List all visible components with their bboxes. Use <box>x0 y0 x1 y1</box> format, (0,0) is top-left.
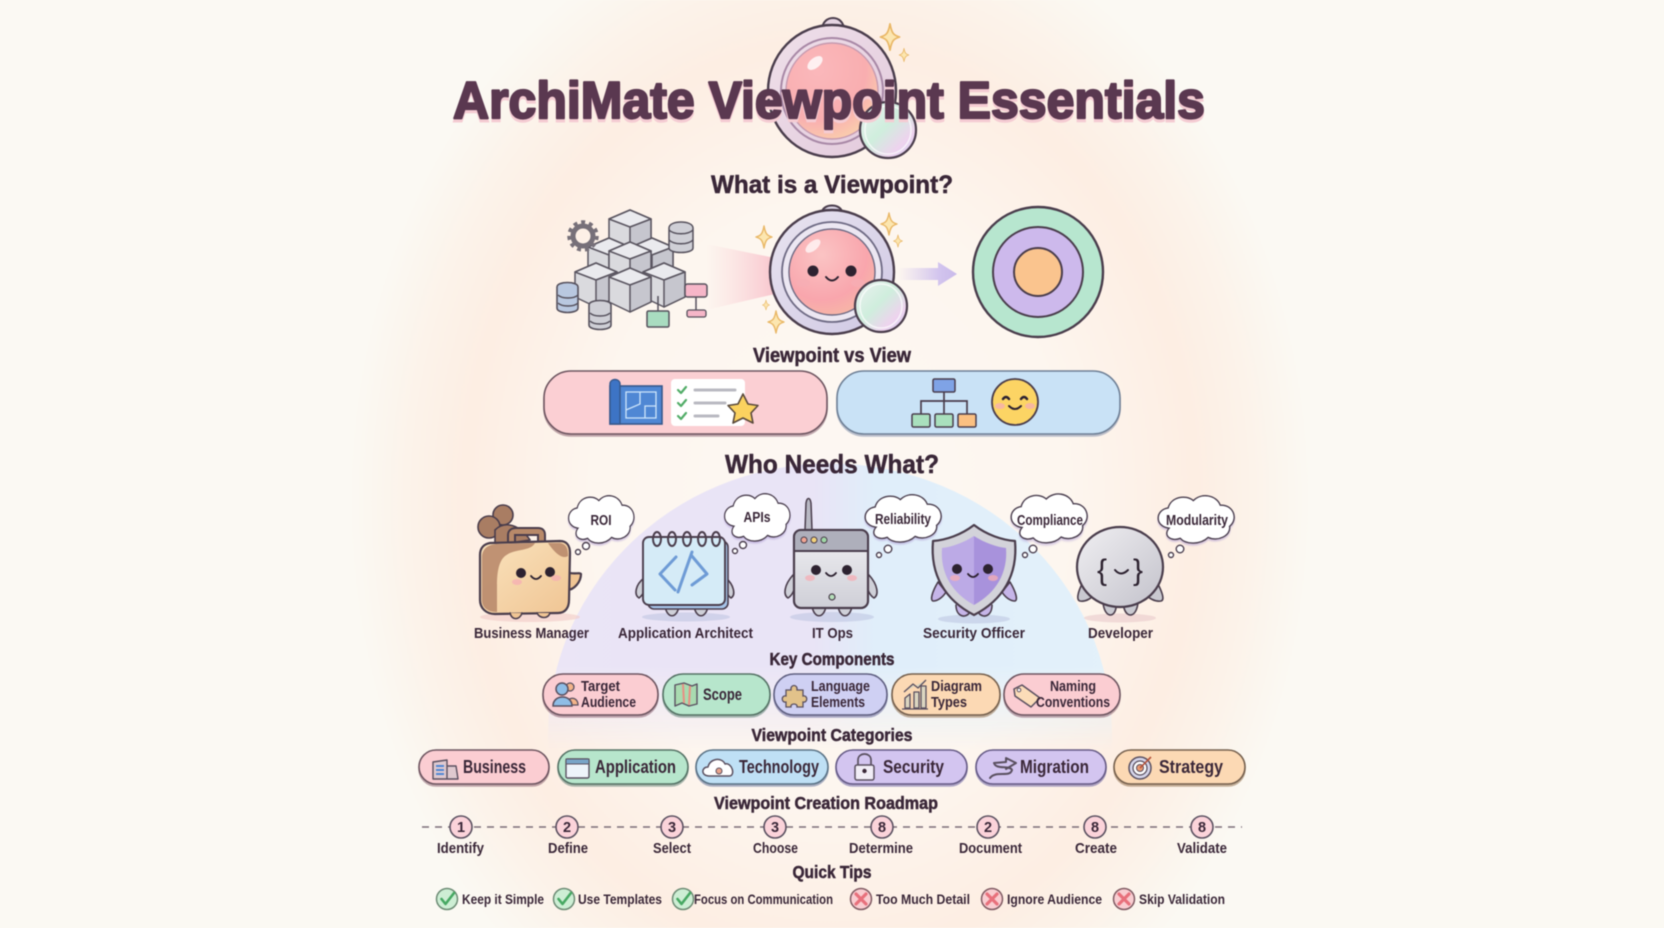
pill: naming conventions: Naming <box>1050 679 1096 695</box>
thought bubble: APIs <box>725 494 790 554</box>
step 1: identify <box>437 816 485 857</box>
tip: keep it simple: Keep it Simple <box>462 892 544 907</box>
pill: technology: Technology <box>739 757 819 777</box>
icon: viewpoint lens character <box>756 206 907 334</box>
pill: technology <box>696 750 828 784</box>
icon: blueprint <box>610 380 662 424</box>
icon: architecture cube pile <box>557 210 707 330</box>
heading: quick tips: Quick Tips <box>792 862 872 882</box>
pill: target audience: Audience <box>581 695 636 711</box>
tip: ignore audience <box>982 888 1102 910</box>
tip: too much detail: Too Much Detail <box>876 892 970 907</box>
icon: sphere character: } <box>1133 554 1143 587</box>
thought bubble: Reliability <box>865 495 941 558</box>
pill: scope <box>663 674 770 715</box>
tip: focus on communication <box>672 888 833 910</box>
pill: diagram types <box>892 674 1000 715</box>
step 3: select: Select <box>653 840 691 857</box>
pill: scope: Scope <box>703 686 742 704</box>
icon: smiley <box>992 379 1038 425</box>
step 6: document: Document <box>959 840 1022 857</box>
step 2: define <box>548 816 588 857</box>
step 7: create <box>1075 816 1117 857</box>
heading: who needs what: Who Needs What? <box>725 449 939 479</box>
step 1: identify: Identify <box>437 840 485 857</box>
label: IT Ops <box>812 625 853 642</box>
pill: naming conventions: Conventions <box>1036 695 1110 711</box>
icon: view target circles <box>973 207 1103 337</box>
title: ArchiMate Viewpoint Essentials <box>453 75 1205 133</box>
step 4: choose: 3 <box>771 820 779 836</box>
roadmap timeline <box>422 816 1242 857</box>
pill: language elements: Elements <box>811 695 865 711</box>
icon: briefcase character <box>478 505 581 619</box>
tip: ignore audience: Ignore Audience <box>1007 892 1102 907</box>
pill: language elements <box>774 674 887 715</box>
heading: what is a viewpoint: What is a Viewpoint? <box>711 171 953 199</box>
thought bubble: Compliance: Compliance <box>1017 513 1083 529</box>
step 7: create: 8 <box>1091 820 1099 836</box>
panel: viewpoint category pills <box>419 750 1245 784</box>
pill: diagram types: Diagram <box>931 679 982 695</box>
tip: use templates <box>554 888 662 910</box>
step 4: choose <box>753 816 798 857</box>
label: Developer <box>1088 625 1153 642</box>
icon: title lens <box>768 18 916 158</box>
thought bubble: APIs: APIs <box>744 510 770 526</box>
persona: application architect <box>618 494 790 642</box>
step 8: validate: 8 <box>1198 820 1206 836</box>
persona: security officer <box>923 494 1087 642</box>
icon: org chart <box>912 379 976 427</box>
icon: notepad character <box>636 532 734 616</box>
pill: target audience <box>543 674 658 715</box>
tip: keep it simple <box>436 888 544 910</box>
thought bubble: Modularity: Modularity <box>1166 513 1228 529</box>
icon: star <box>728 394 758 423</box>
icon: sphere character <box>1077 527 1163 615</box>
pill: language elements: Language <box>811 679 870 695</box>
pill: business <box>419 750 549 784</box>
pill: naming conventions <box>1004 674 1120 715</box>
step 4: choose: Choose <box>753 840 798 857</box>
pill: strategy <box>1114 750 1245 784</box>
panel: view <box>837 371 1120 434</box>
pill: target audience: Target <box>581 679 620 695</box>
background dome <box>548 464 1112 750</box>
thought bubble: Compliance <box>1011 494 1087 558</box>
icon: checklist <box>671 379 745 426</box>
pill: migration: Migration <box>1020 757 1089 777</box>
pill: application <box>558 750 688 784</box>
tip: use templates: Use Templates <box>578 892 662 907</box>
tip: focus on communication: Focus on Communication <box>694 892 833 907</box>
pill: migration <box>976 750 1106 784</box>
step 2: define: 2 <box>563 820 571 836</box>
step 5: determine <box>849 816 913 857</box>
icon: server character <box>785 498 877 616</box>
pill: business: Business <box>463 757 526 777</box>
persona: IT ops <box>785 495 941 642</box>
heading: viewpoint vs view: Viewpoint vs View <box>753 345 911 367</box>
label: Application Architect <box>618 625 753 642</box>
step 6: document: 2 <box>984 820 992 836</box>
arrow: lens to view <box>898 262 957 286</box>
quick tips row <box>436 888 1225 910</box>
thought bubble: Modularity <box>1158 496 1234 558</box>
arrow: pink beam into lens <box>706 244 775 310</box>
pill: strategy: Strategy <box>1159 757 1223 777</box>
tip: too much detail <box>850 888 970 910</box>
heading: creation roadmap: Viewpoint Creation Roadmap <box>714 793 938 813</box>
step 1: identify: 1 <box>457 820 465 836</box>
step 3: select: 3 <box>668 820 676 836</box>
step 8: validate <box>1177 816 1227 857</box>
tip: skip validation <box>1114 888 1225 910</box>
heading: key components: Key Components <box>770 649 895 669</box>
step 5: determine: Determine <box>849 840 913 857</box>
icon: sphere character: { <box>1097 554 1107 587</box>
label: Business Manager <box>474 625 589 642</box>
panel: viewpoint <box>544 371 827 434</box>
step 2: define: Define <box>548 840 588 857</box>
thought bubble: ROI: ROI <box>590 513 612 529</box>
step 6: document <box>959 816 1022 857</box>
title: ArchiMate Viewpoint Essentials <box>453 72 1205 130</box>
step 7: create: Create <box>1075 840 1117 857</box>
panel: key components pills <box>543 674 1120 715</box>
tip: skip validation: Skip Validation <box>1139 892 1225 907</box>
pill: application: Application <box>595 757 676 777</box>
label: Security Officer <box>923 625 1025 642</box>
step 5: determine: 8 <box>878 820 886 836</box>
pill: security <box>836 750 967 784</box>
persona: business manager <box>474 496 634 642</box>
pill: security: Security <box>883 757 944 777</box>
persona: developer <box>1077 496 1234 642</box>
thought bubble: Reliability: Reliability <box>875 512 931 528</box>
thought bubble: ROI <box>569 496 634 554</box>
step 3: select <box>653 816 691 857</box>
step 8: validate: Validate <box>1177 840 1227 857</box>
icon: shield character <box>932 525 1016 616</box>
pill: diagram types: Types <box>931 695 967 711</box>
heading: viewpoint categories: Viewpoint Categories <box>752 725 913 745</box>
